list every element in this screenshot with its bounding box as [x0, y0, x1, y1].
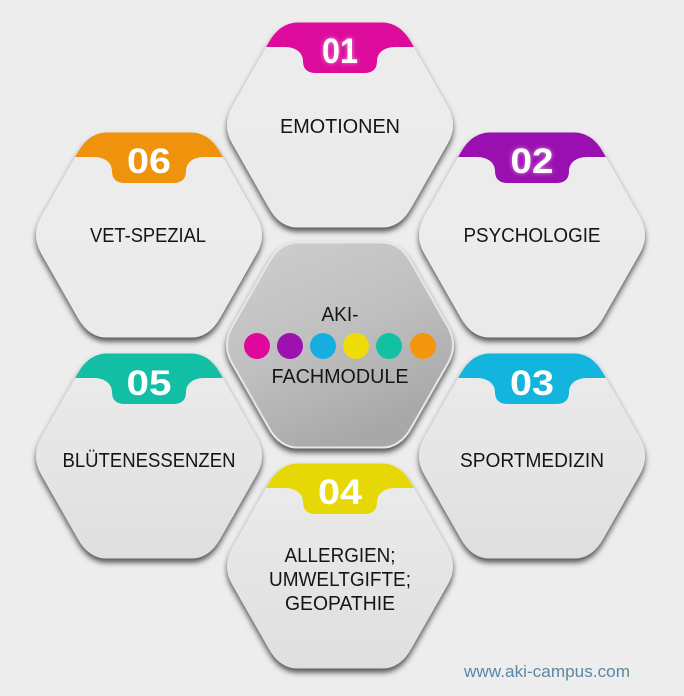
center label bottom: FACHMODULE: [272, 366, 408, 388]
panel: 01 Emotionen: [220, 15, 460, 228]
label: Allergien, Umweltgifte, Geopathie: GEOPATHIE: [285, 593, 395, 615]
number 03: 03: [510, 364, 554, 403]
label: Allergien, Umweltgifte, Geopathie: [269, 545, 411, 615]
label: Allergien, Umweltgifte, Geopathie: UMWELTGIFTE;: [269, 569, 411, 591]
panel: 06 Vet-Spezial: [29, 125, 269, 338]
header tab 02: [458, 132, 606, 183]
label: Psychologie: PSYCHOLOGIE: [464, 225, 600, 247]
label: Sportmedizin: SPORTMEDIZIN: [460, 450, 604, 472]
colored dots: [244, 333, 436, 359]
panel: 04 Allergien: [220, 456, 460, 668]
panel: 03 Sportmedizin: [412, 346, 652, 558]
label: Blütenessenzen: BLÜTENESSENZEN: [62, 450, 236, 472]
header tab 03: [458, 354, 606, 404]
number 05: 05: [127, 364, 171, 403]
number 01: 01: [322, 32, 358, 71]
header tab 06: [75, 132, 223, 183]
center label top: AKI-: [322, 304, 358, 326]
panel: 05 Blütenessenzen: [29, 346, 269, 558]
label: Allergien, Umweltgifte, Geopathie: ALLERGIEN;: [284, 545, 396, 567]
number 04: 04: [318, 473, 363, 512]
label: Emotionen: EMOTIONEN: [280, 116, 400, 138]
header tab 05: [75, 354, 223, 404]
number 02: 02: [510, 142, 554, 181]
panel: center AKI-Fachmodule: [227, 242, 453, 448]
header tab 04: [266, 464, 414, 514]
number 06: 06: [127, 142, 171, 181]
label: Vet-Spezial: VET-SPEZIAL: [90, 225, 206, 247]
header tab 01: [266, 22, 414, 73]
panel: 02 Psychologie: [412, 125, 652, 338]
website url: www.aki-campus.com: [463, 662, 630, 681]
